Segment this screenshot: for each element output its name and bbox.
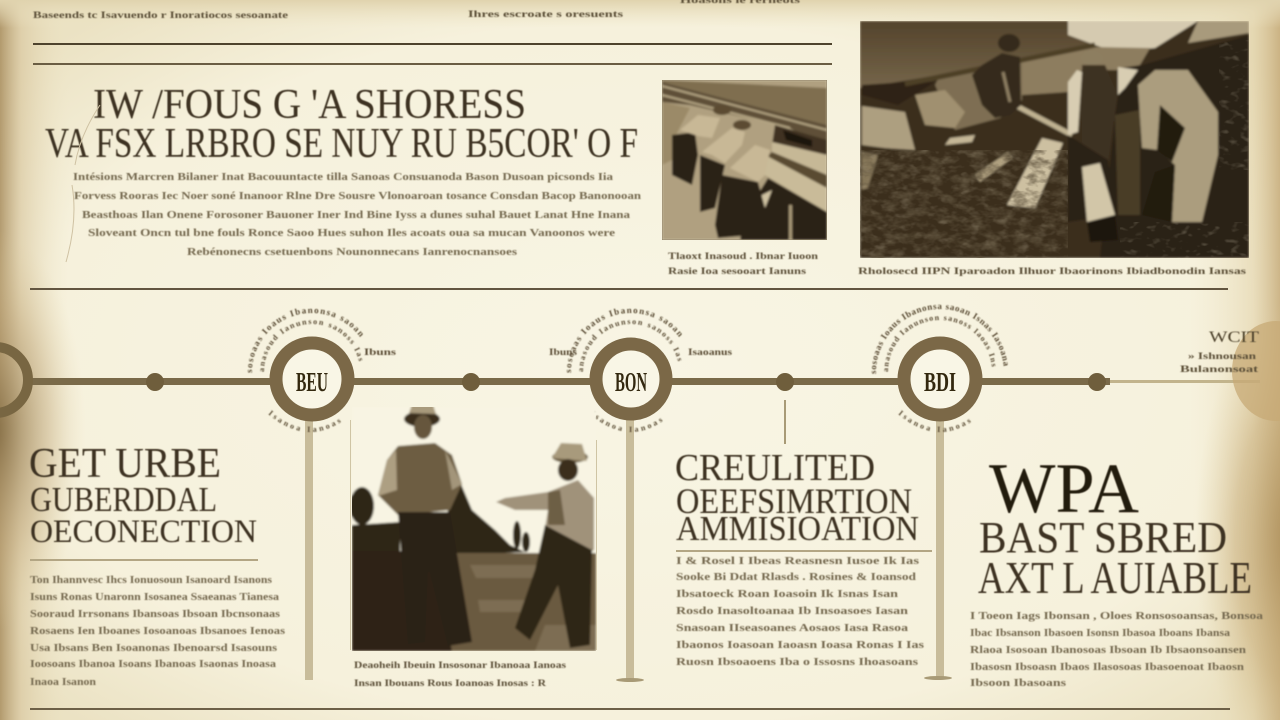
pipe lever [1016, 104, 1074, 138]
sky [1068, 21, 1198, 52]
intro paragraph: Beasthoas Ilan Onene Forosoner Bauoner Iner Ind Bine Iyss a dunes suhal Bauet Lanat Hne Inana [82, 210, 630, 221]
caption: workers on pipe: Rasie Ioa sesooart Ianuns [668, 267, 806, 277]
top clipped text fragments: Ihres escroate s oresuents [468, 10, 623, 20]
heads [713, 105, 751, 130]
dots [146, 373, 164, 391]
column 1 heading: GET URBE [29, 441, 221, 487]
side note: upper right: » Ishnousan [1188, 352, 1257, 362]
worker left [972, 34, 1021, 118]
column 3 text: Ibasosn Ibsoasn Ibaos Ilasosoas Ibasoenoat Ibaosn [970, 662, 1245, 673]
photo: workers on pipe [662, 80, 827, 240]
hill [860, 21, 1095, 88]
date node 3 [871, 304, 1008, 680]
crack mark [66, 105, 100, 262]
date node 2: BON [615, 367, 647, 397]
date node 3: Isanoa Ianoas [898, 410, 972, 433]
worker right [1138, 70, 1218, 222]
caption: two men: Deaoheih Ibeuin Insosonar Ibanoaa Ianoas [354, 661, 566, 671]
caption: workers on pipe: Tlaoxt Inasoud . Ibnar Iuoon [668, 252, 819, 262]
column 2 heading [675, 447, 919, 548]
distant field [662, 80, 827, 125]
date node 1: anasoud Ianunson sanoss Ias [260, 320, 363, 372]
column 1 heading: GUBERDDAL [30, 480, 217, 519]
date node 1 [247, 308, 397, 680]
column 2 heading: AMMISIOATION [676, 509, 919, 548]
column 3 text: Ibac Ibsanson Ibasoen Isonsn Ibasoa Iboans Ibansa [970, 628, 1230, 639]
intro paragraph: Rebénonecns csetuenbons Nounonnecans Ianrenocnansoes [187, 247, 517, 258]
column 1 heading: OECONECTION [30, 514, 257, 550]
top clipped text fragments [33, 0, 800, 21]
column 2 [675, 447, 932, 668]
timeline bar [30, 378, 1110, 385]
section rule [30, 288, 1228, 290]
date node 2: Isaoanus [688, 347, 733, 357]
column 2 heading: CREULITED [675, 447, 875, 489]
column 3 text: Rlaoa Isosoan Ibanosoas Ibsoan Ib Ibsaonsoansen [970, 645, 1247, 656]
header rules [33, 43, 832, 65]
trees [352, 484, 532, 555]
intro paragraph: Sloveant Oncn tul bne fouls Ronce Saoo Hues suhon Iles acoats oua sa mucan Vanoonos were [88, 228, 616, 239]
workers' legs [672, 132, 765, 238]
caption: two men: Insan Ibouans Rous Ioanoas Inosas : R [354, 679, 546, 689]
main headline: VA FSX LRBRO SE NUY RU B5COR' O F [45, 121, 638, 167]
workers' backs [680, 115, 770, 182]
date node 1: Isanoa Ianoas [268, 410, 342, 433]
field [449, 550, 596, 651]
intro paragraph: Forvess Rooras Iec Noer soné Inanoor Rlne Dre Sousre Vlonoaroan tosance Consdan Bacop Banonooan [74, 191, 642, 202]
white slab [1007, 138, 1063, 208]
column 2 text: Ruosn Ibsoaoens Iba o Issosns Ihoasoans [676, 657, 918, 668]
date node 1: BEU [296, 367, 328, 397]
column 2 text: I & Rosel I Ibeas Reasnesn Iusoe Ik Ias [676, 556, 919, 567]
date node 2 [548, 308, 733, 682]
date node 2: Isanoa Ianoas [594, 411, 664, 433]
column 2 text: Ibaonos Ioasoan Iaoasn Ioasa Ronas I Ias [676, 640, 924, 651]
column 2 text: Snasoan IIseasoanes Aosaos Iasa Rasoa [676, 623, 908, 634]
date node 3: anasoud Ianunson sanoss Iaoas Ins [884, 316, 996, 372]
top clipped text fragments: Baseends tc Isavuendo r Inoratiocos sesoanate [33, 11, 288, 21]
column 3 text: I Toeon Iags Ibonsan , Oloes Ronsosoansas, Bonsoa [970, 611, 1263, 622]
connector tick [784, 400, 786, 444]
side note: upper right: Bulanonsoat [1180, 365, 1259, 375]
photo: two men talking [350, 402, 597, 651]
photo: digging crew [860, 21, 1249, 258]
date node 1: sosoaas Ioaus Ibanonsa saoan [247, 308, 364, 374]
column 3 [970, 450, 1263, 689]
dark lower right [740, 178, 827, 240]
column 3 text: Ibsoon Ibasoans [970, 678, 1066, 689]
caption: digging crew: Rholosecd IIPN Iparoadon Ilhuor Ibaorinons Ibiadbonodin Iansas [858, 267, 1246, 277]
date node 2: Ibuns [549, 347, 578, 357]
long log [905, 45, 1095, 84]
column 1 text: Usa Ibsans Ben Isoanonas Ibenoarsd Isasouns [30, 643, 277, 654]
column 3 text [970, 611, 1263, 689]
timeline [0, 304, 1280, 682]
debris pile right [1100, 35, 1249, 258]
column 1 [29, 441, 285, 688]
man left [378, 402, 472, 646]
main headline [45, 82, 638, 167]
column 1 text: Isuns Ronas Unaronn Isosanea Ssaeanas Tianesa [30, 592, 279, 603]
column 1 text: Ton Ihannvesc Ihcs Ionuosoun Isanoard Isanons [30, 575, 272, 586]
rails [662, 81, 826, 142]
date node 2: sosoaas Ioaus Ibanonsa saoan [566, 308, 682, 374]
end marker [1232, 321, 1280, 421]
side note: upper right [1180, 329, 1259, 375]
white cylinder [1082, 163, 1115, 222]
column 1 text: Rosaens Ien Iboanes Iosoanoas Ibsanoes Ienoas [30, 626, 285, 637]
left rocks [862, 106, 915, 150]
column 3 heading: BAST SBRED [979, 513, 1227, 562]
column 2 text: Sooke Bi Ddat Rlasds . Rosines & Ioansod [676, 572, 917, 583]
column 1 text: Sooraud Irrsonans Ibansoas Ibsoan Ibcnsonaas [30, 609, 280, 620]
column 3 heading [978, 450, 1252, 603]
column 2 text: Rosdo Inasoltoanaa Ib Insoasoes Iasan [676, 606, 909, 617]
date node 3: sosoaas Ioaus Ibanonsa saoan Isnas Iasoana [871, 304, 1008, 374]
caption: workers on pipe [668, 252, 819, 277]
intro paragraph [73, 172, 642, 258]
column 2 text [676, 556, 924, 668]
middle distance [1022, 47, 1150, 95]
column 1 text [30, 575, 285, 688]
pipes [772, 142, 827, 175]
column 1 text: Inaoa Isanon [30, 677, 97, 688]
start ring [0, 347, 28, 413]
column 2 text: Ibsatoeck Roan Ioasoin Ik Isnas Isan [676, 589, 899, 600]
man right [496, 443, 594, 648]
column 2 heading: OEEFSIMRTION [676, 481, 912, 521]
column 1 text: Ioosoans Ibanoa Isoans Ibanoas Isaonas Inoasa [30, 659, 276, 670]
ground speckle [860, 150, 1068, 258]
date node 2: anasoud Ianunson sanoss Ias [578, 320, 682, 372]
bottom rule [30, 708, 1230, 710]
date node 3: BDI [924, 367, 956, 397]
main headline: IW /FOUS G 'A SHORESS [93, 82, 526, 128]
intro paragraph: Intésions Marcren Bilaner Inat Bacouuntacte tilla Sanoas Consuanoda Bason Dusoan picsonds Iia [73, 172, 613, 183]
worker middle [1068, 51, 1140, 222]
column 3 heading: WPA [989, 450, 1139, 528]
caption: two men [354, 661, 566, 689]
date node 1: Ibuns [364, 347, 397, 357]
side note: upper right: WCIT [1209, 329, 1259, 346]
column 1 heading [29, 441, 257, 550]
